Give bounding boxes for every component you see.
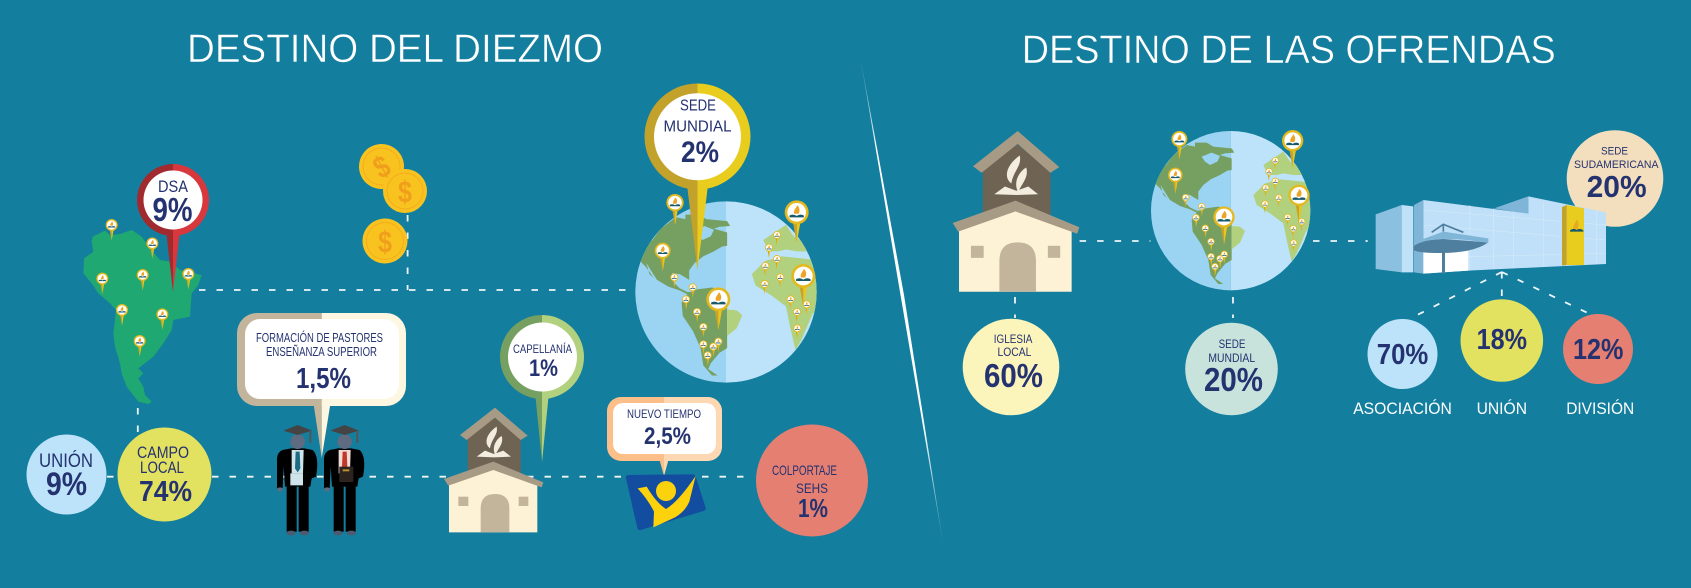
icon: gold coins: $ [367,148,396,186]
connector lines: diezmo [107,215,750,477]
circle: asociación 70%: 70% [1377,339,1428,371]
callout: formación de pastores 1,5%: FORMACIÓN DE PASTORES [256,330,383,345]
globe pins [1168,130,1310,276]
pin: sede mundial 2%: 2% [681,136,719,169]
circle: unión 9%: UNIÓN [39,450,93,472]
label: unión: UNIÓN [1477,399,1527,418]
callout: nuevo tiempo 2,5%: 2,5% [644,423,691,450]
map pins [96,219,194,357]
circle: sede sudamericana 20%: SUDAMERICANA [1574,159,1659,171]
circle: unión 9%: 9% [46,466,87,502]
globe: diezmo [632,194,824,383]
pin: sede mundial 2%: MUNDIAL [664,118,732,136]
circle: campo local 74% [118,428,212,522]
circle: unión 18%: 18% [1477,324,1527,356]
graduate one [277,425,317,535]
connector lines: ofrendas [1015,241,1588,318]
circle: sede mundial 20%: MUNDIAL [1208,353,1256,365]
icon: nuevo tiempo logo card [626,474,706,530]
circle: iglesia local 60%: 60% [984,357,1043,394]
circle: colportaje sehs 1%: 1% [798,493,828,523]
circle: campo local 74%: CAMPO [137,443,189,462]
circle: sede sudamericana 20%: SEDE [1601,146,1628,158]
circle: iglesia local 60%: LOCAL [998,347,1032,359]
pin: DSA 9%: DSA [158,178,188,196]
icon: church ofrendas [953,131,1079,292]
map shape [83,230,202,404]
circle: campo local 74%: 74% [139,476,192,508]
circle: asociación 70% [1368,319,1438,389]
label: asociación: ASOCIACIÓN [1353,399,1452,418]
divider line [859,50,945,555]
title: destino del diezmo: DESTINO DEL DIEZMO [187,27,603,71]
icon: gold coins [351,136,427,264]
circle: unión 18% [1460,299,1543,382]
circle: división 12% [1563,314,1633,384]
circle: unión 9% [26,434,106,514]
icon: headquarters building [1376,196,1606,274]
pin: sede mundial 2% [645,84,750,270]
circle: sede mundial 20% [1185,323,1278,415]
pin: capellanía 1%: CAPELLANÍA [513,341,572,356]
continents [1148,143,1317,284]
circle: colportaje sehs 1% [756,424,868,536]
circle: colportaje sehs 1%: SEHS [796,480,828,496]
globe base [1151,131,1310,290]
circle: campo local 74%: LOCAL [140,458,184,477]
callout: nuevo tiempo 2,5%: NUEVO TIEMPO [627,407,701,421]
title: destino de las ofrendas: DESTINO DE LAS OFRENDAS [1022,28,1556,72]
callout: formación de pastores 1,5%: ENSEÑANZA SUPERIOR [266,345,377,359]
circle: sede sudamericana 20% [1567,130,1663,227]
circle: sede sudamericana 20%: 20% [1587,169,1647,204]
icon: church diezmo [444,408,543,532]
pin: capellanía 1%: 1% [529,355,558,382]
graduate two [324,425,364,535]
globe pins [655,194,815,366]
callout: formación de pastores 1,5% [237,313,406,458]
pin: sede mundial 2%: SEDE [680,98,716,114]
icon: graduates [277,425,364,535]
circle: sede mundial 20%: SEDE [1219,339,1246,351]
circle: colportaje sehs 1%: COLPORTAJE [772,462,837,478]
icon: gold coins: $ [378,224,392,259]
callout: nuevo tiempo 2,5% [607,397,722,476]
panel: south america map [83,219,202,404]
pin: DSA 9% [137,164,209,292]
circle: sede mundial 20%: 20% [1204,361,1263,398]
globe: ofrendas [1148,130,1317,290]
callout: formación de pastores 1,5%: 1,5% [296,363,351,395]
globe base [635,201,817,383]
circle: iglesia local 60%: IGLESIA [994,334,1033,346]
label: división: DIVISIÓN [1566,399,1634,418]
pin: DSA 9%: 9% [152,191,192,228]
circle: iglesia local 60% [963,319,1059,415]
circle: división 12%: 12% [1573,334,1624,366]
continents [632,215,824,375]
pin: capellanía 1% [500,315,584,462]
icon: gold coins: $ [398,174,412,209]
